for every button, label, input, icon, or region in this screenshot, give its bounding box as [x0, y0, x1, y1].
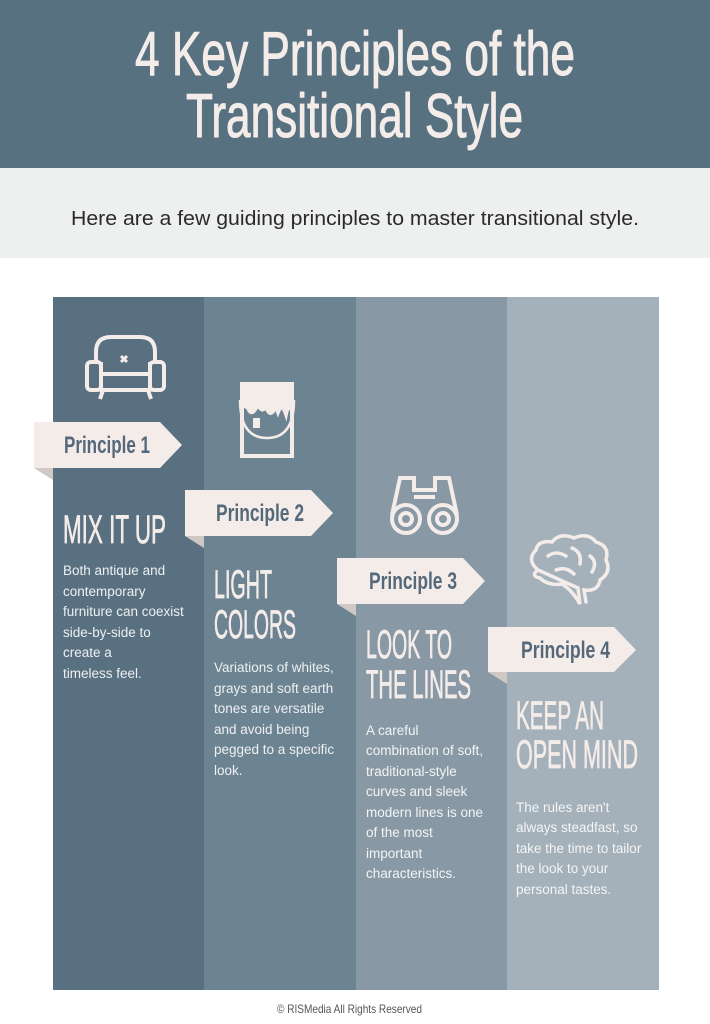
text block: principle 1: furniture can coexist [63, 604, 184, 619]
text block: principle 2 [214, 563, 334, 778]
text block: principle 3: characteristics. [366, 866, 456, 881]
icon: brain [531, 536, 608, 604]
text block: principle 3: LOOK TO [366, 623, 452, 667]
text block: principle 4: always steadfast, so [516, 820, 638, 835]
text block: principle 2: LIGHT [214, 563, 272, 607]
text block: principle 3: of the most [366, 825, 433, 840]
title: Transitional Style [186, 82, 523, 151]
banner: principle 2: Principle 2 [216, 500, 304, 527]
text block: principle 3: THE LINES [366, 663, 471, 707]
text block: principle 4: KEEP AN [516, 694, 604, 738]
banner: principle 3 [337, 558, 485, 616]
title [135, 20, 575, 151]
icon: armchair [87, 337, 164, 399]
banner: principle 2 [185, 490, 333, 548]
text block: principle 3: important [366, 846, 423, 861]
banner: principle 1: Principle 1 [64, 432, 150, 459]
banner: principle 4 [488, 627, 636, 684]
text block: principle 1: contemporary [63, 584, 146, 599]
text block: principle 1: Both antique and [63, 563, 165, 578]
text block: principle 2: COLORS [214, 603, 296, 647]
text block: principle 2: pegged to a specific [214, 742, 334, 757]
text block: principle 2: and avoid being [214, 722, 309, 737]
banner: principle 3: Principle 3 [369, 568, 457, 595]
text block: principle 2: look. [214, 763, 243, 778]
text block: principle 1 [63, 508, 184, 681]
text block: principle 3 [366, 623, 483, 881]
text block: principle 3: combination of soft, [366, 743, 483, 758]
text block: principle 1: MIX IT UP [63, 508, 166, 552]
text block: principle 3: A careful [366, 723, 419, 738]
text block: principle 2: grays and soft earth [214, 681, 333, 696]
banner: principle 4: Principle 4 [521, 637, 610, 664]
footer: © RISMedia All Rights Reserved [277, 1002, 422, 1016]
text block: principle 4: the look to your [516, 861, 609, 876]
text block: principle 4 [516, 694, 642, 897]
icon: binoculars [392, 478, 457, 533]
text block: principle 2: Variations of whites, [214, 660, 334, 675]
text block: principle 1: timeless feel. [63, 666, 142, 681]
text block: principle 4: The rules aren't [516, 800, 610, 815]
subtitle band: Here are a few guiding principles to master transitional style. [71, 208, 639, 230]
text block: principle 1: create a [63, 645, 112, 660]
text block: principle 3: curves and sleek [366, 784, 468, 799]
banner: principle 1 [34, 422, 182, 480]
text block: principle 3: traditional-style [366, 764, 457, 779]
columns [53, 297, 659, 990]
text block: principle 4: take the time to tailor [516, 841, 642, 856]
icon: paint can [240, 384, 294, 456]
header band [0, 0, 710, 168]
text block: principle 3: modern lines is one [366, 805, 483, 820]
subtitle band [0, 168, 710, 258]
text block: principle 1: side-by-side to [63, 625, 151, 640]
text block: principle 4: personal tastes. [516, 882, 611, 897]
text block: principle 2: tones are versatile [214, 701, 324, 716]
